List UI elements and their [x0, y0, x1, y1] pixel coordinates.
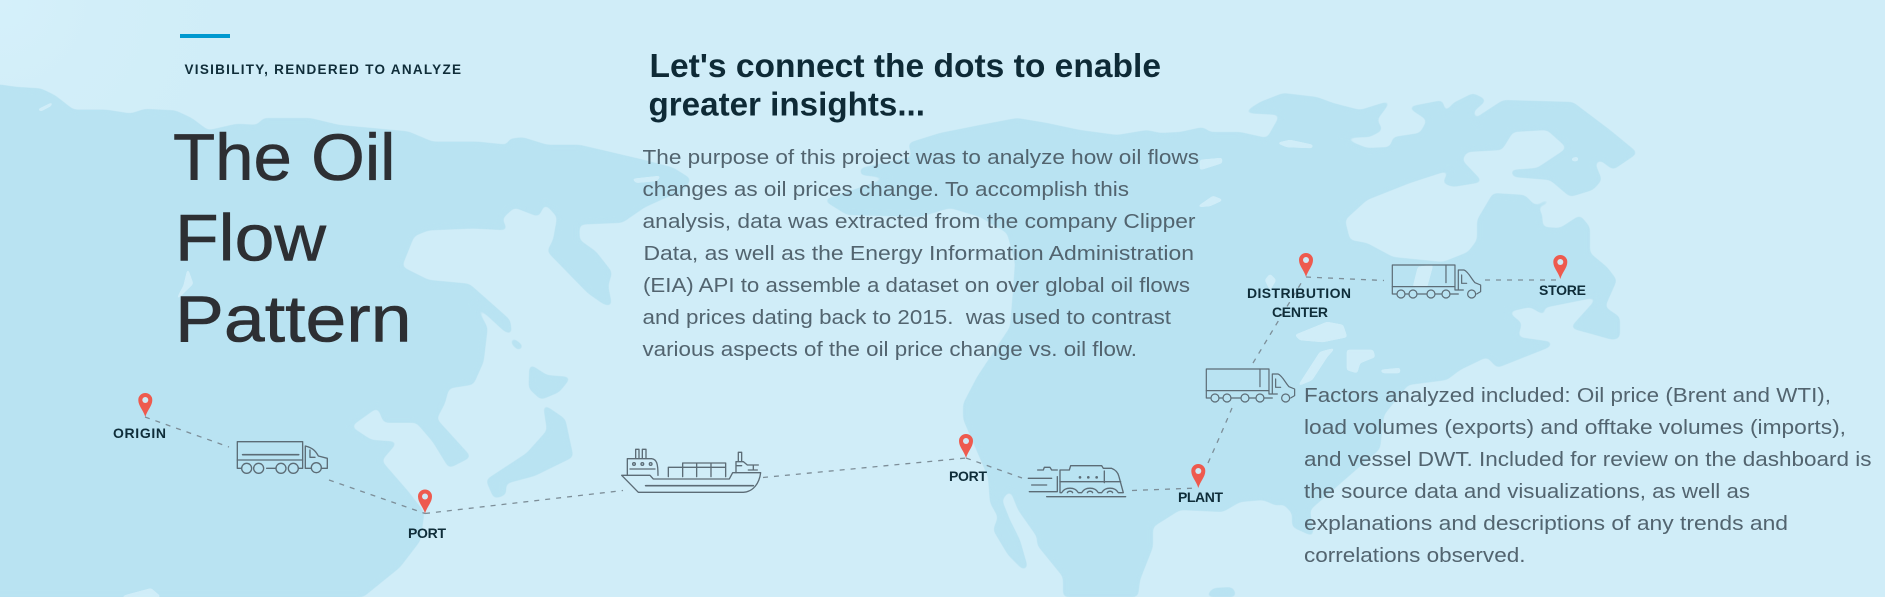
icon: truck 1	[237, 442, 327, 473]
label: store: STORE	[1539, 282, 1586, 298]
icon: train	[1028, 466, 1126, 497]
factors analyzed paragraph: and vessel DWT. Included for review on the dashboard is	[1304, 449, 1872, 471]
label: distribution center: DISTRIBUTION	[1247, 285, 1351, 301]
icon: truck 2	[1392, 265, 1481, 298]
factors analyzed paragraph: correlations observed.	[1304, 545, 1526, 567]
pin: port 1	[418, 490, 432, 514]
title	[173, 120, 412, 355]
pin: origin	[138, 393, 152, 417]
title: The Oil	[173, 120, 396, 194]
project purpose paragraph: changes as oil prices change. To accomplish this	[642, 179, 1129, 201]
factors analyzed paragraph: Factors analyzed included: Oil price (Brent and WTI),	[1304, 385, 1831, 407]
accent bar	[180, 34, 230, 38]
dashed route lines	[145, 277, 1556, 514]
eyebrow label: VISIBILITY, RENDERED TO ANALYZE	[184, 62, 461, 77]
label: distribution center	[1247, 285, 1351, 320]
project purpose paragraph: The purpose of this project was to analyze how oil flows	[642, 147, 1199, 169]
pin: plant	[1191, 464, 1205, 488]
pin: distribution center	[1299, 253, 1313, 277]
title: Flow	[175, 201, 326, 275]
project purpose paragraph: various aspects of the oil price change vs. oil flow.	[642, 339, 1137, 361]
project purpose paragraph: and prices dating back to 2015. was used to contrast	[642, 307, 1171, 329]
project purpose paragraph	[642, 147, 1199, 361]
label: port 1: PORT	[408, 525, 446, 541]
project purpose paragraph: (EIA) API to assemble a dataset on over global oil flows	[643, 275, 1190, 297]
factors analyzed paragraph: the source data and visualizations, as well as	[1304, 481, 1750, 503]
factors analyzed paragraph: load volumes (exports) and offtake volumes (imports),	[1304, 417, 1846, 439]
world map land	[0, 85, 1638, 597]
pin: port 2	[959, 434, 973, 458]
heading: Let's connect the dots to enable	[650, 47, 1161, 84]
map inland seas and lakes	[38, 102, 1578, 597]
label: origin: ORIGIN	[113, 425, 166, 441]
heading: greater insights...	[648, 86, 925, 122]
icon: cargo ship	[622, 449, 761, 492]
label: port 2: PORT	[949, 468, 987, 484]
icon: truck 3	[1206, 369, 1295, 402]
label: plant: PLANT	[1178, 489, 1223, 505]
factors analyzed paragraph	[1304, 385, 1872, 567]
title: Pattern	[175, 281, 412, 355]
project purpose paragraph: analysis, data was extracted from the company Clipper	[642, 211, 1196, 233]
project purpose paragraph: Data, as well as the Energy Information Administration	[644, 243, 1194, 265]
factors analyzed paragraph: explanations and descriptions of any trends and	[1304, 513, 1788, 535]
pin: store	[1553, 255, 1567, 279]
heading	[648, 47, 1161, 122]
label: distribution center: CENTER	[1272, 304, 1328, 320]
